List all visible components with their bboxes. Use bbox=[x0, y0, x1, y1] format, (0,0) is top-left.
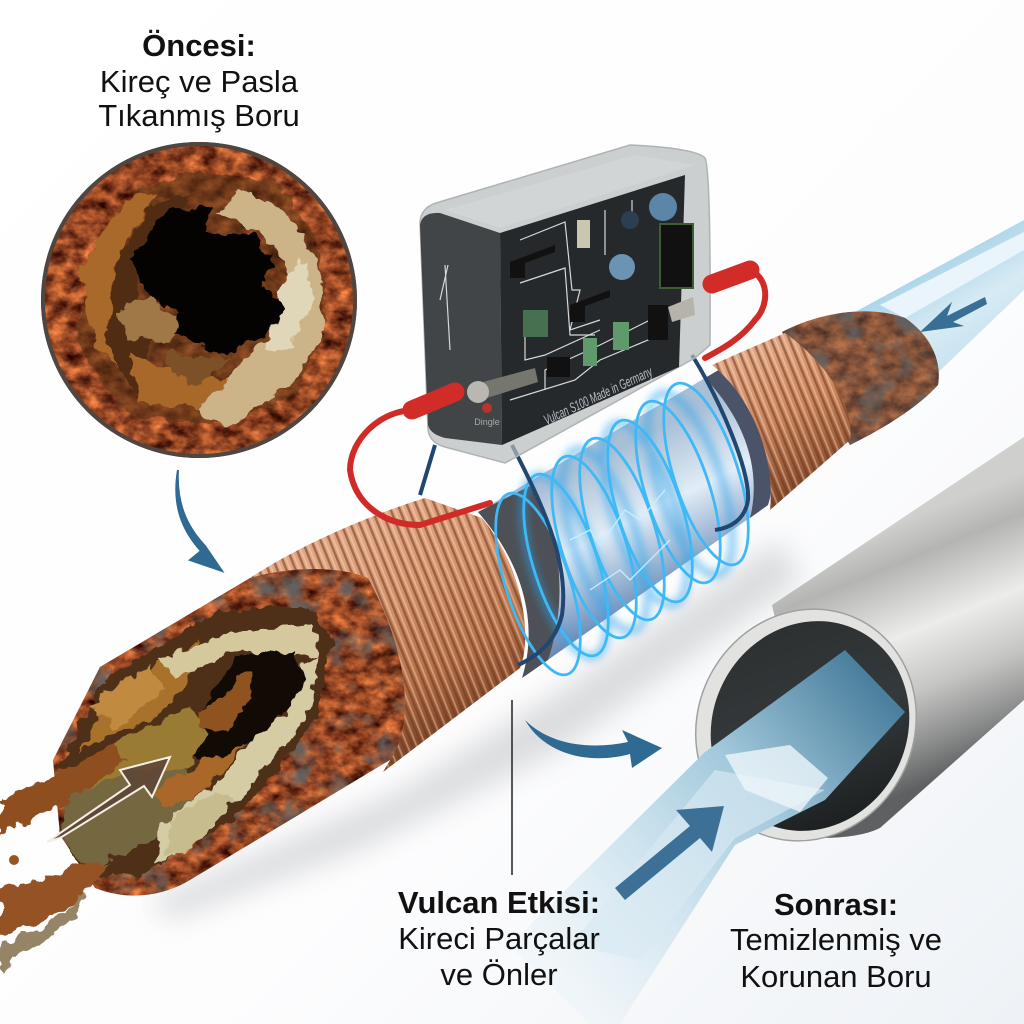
heading: after: Temizlenmiş ve bbox=[730, 922, 942, 957]
limescale top bbox=[160, 625, 318, 680]
heading: Vulcan effect bbox=[398, 885, 600, 992]
heading: before: Kireç ve Pasla bbox=[100, 64, 299, 99]
circuit board bbox=[500, 175, 685, 445]
icon: inlet arrow bbox=[920, 297, 987, 332]
heading: before: Öncesi: bbox=[142, 28, 256, 63]
pipe: rusty right section bbox=[782, 311, 939, 445]
limescale right bbox=[155, 655, 318, 865]
red cable: left bbox=[350, 392, 490, 525]
leader line bbox=[511, 700, 513, 875]
copper coil: left bbox=[250, 498, 525, 772]
connector left bbox=[472, 368, 538, 402]
heading: Vulcan effect: Kireci Parçalar bbox=[398, 921, 600, 956]
heading: Vulcan effect: Vulcan Etkisi: bbox=[398, 885, 600, 920]
heading: Vulcan effect: ve Önler bbox=[440, 957, 558, 992]
arrow: circle to pipe bbox=[176, 470, 222, 571]
device: transparent Vulcan S100 box: Dingle bbox=[474, 417, 500, 427]
pipe: middle section bbox=[478, 368, 771, 676]
heading: after: Sonrası: bbox=[774, 887, 898, 922]
pipe: upper-right water inlet bbox=[855, 220, 1024, 385]
heading: after bbox=[730, 887, 942, 994]
device: transparent Vulcan S100 box bbox=[420, 145, 710, 463]
components bbox=[510, 245, 555, 278]
dark hole bbox=[133, 205, 285, 355]
rusty debris stream bbox=[0, 745, 125, 975]
red cable: right bbox=[705, 268, 765, 358]
heading: before: Tıkanmış Boru bbox=[98, 98, 300, 133]
device label: Vulcan S100 Made in Germany bbox=[541, 363, 655, 428]
clean water stream bbox=[510, 650, 905, 1024]
crust deposits bbox=[190, 190, 328, 428]
icon: blue flow arrow bbox=[615, 806, 724, 900]
panel: clogged pipe circle close-up bbox=[41, 142, 357, 458]
heading: before bbox=[98, 28, 300, 133]
navy coil wires bbox=[420, 355, 748, 665]
shadow under main pipe bbox=[150, 540, 800, 920]
electromagnetic field rings bbox=[478, 374, 766, 684]
curved arrow: vulcan to clean pipe bbox=[525, 720, 662, 768]
device side bbox=[420, 213, 502, 445]
copper coil: right bbox=[712, 333, 851, 510]
pipe: dark rusty collars bbox=[478, 368, 771, 678]
opening bbox=[60, 608, 332, 878]
connector right bbox=[668, 297, 695, 322]
icon: brown flow arrow bbox=[47, 757, 170, 842]
pipe: rusty front section bbox=[53, 560, 414, 896]
traces bbox=[440, 200, 660, 400]
clean steel pipe bbox=[655, 437, 1024, 880]
device case bbox=[420, 145, 710, 463]
hole bbox=[187, 652, 304, 765]
heading: after: Korunan Boru bbox=[740, 959, 932, 994]
